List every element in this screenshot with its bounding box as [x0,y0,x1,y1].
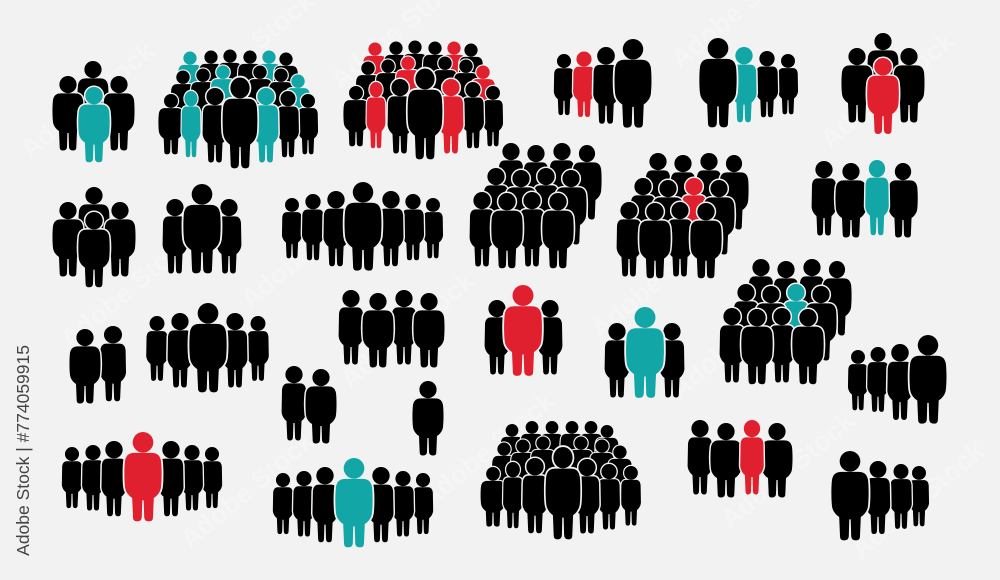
watermark pattern: Adobe Stock [15,35,161,165]
group: trio with tall red center [485,285,562,376]
group: row of five black people [146,303,269,392]
group: four black people [52,187,136,287]
group: black crowd with tall center [481,421,641,539]
group: crowd with red figure [617,153,749,278]
watermark pattern: Adobe Stock [335,265,481,395]
icon: single person [412,381,444,456]
group: teal accented crowd [158,50,318,168]
watermark pattern: Adobe Stock [175,425,321,555]
group: row of seven with red center [62,432,222,521]
group: pair of people [282,366,337,444]
group: four people, red in front [841,33,925,134]
group: crowd with teal figure [720,259,852,384]
group: four people, teal in front [52,61,135,162]
group: descending line with red figure [554,39,651,128]
watermark pattern: Adobe Stock [665,275,811,405]
group: descending line of four [831,451,929,540]
group: line of four with teal figure [812,160,918,238]
group: ascending line of four [848,335,946,424]
group: row of seven black people [282,182,443,271]
watermark pattern: Adobe Stock [235,185,381,315]
group: trio with tall center [163,184,241,274]
group: row of four black people [339,290,445,368]
watermark pattern: Adobe Stock [845,435,991,565]
group: black crowd in three rows [470,143,602,268]
group: row of seven with teal center [273,458,433,547]
group: line with teal figure [699,38,798,127]
group: trio with tall teal center [605,307,684,398]
group: pair of people [69,326,126,404]
watermark pattern: Adobe Stock [815,25,961,155]
stock id side text: Adobe Stock | #774059915 [13,345,33,556]
group: red accented crowd [343,40,503,159]
watermark pattern: Adobe Stock [415,385,561,515]
watermark pattern: Adobe Stock [55,225,201,355]
watermark pattern: Adobe Stock [715,405,861,535]
watermark pattern: Adobe Stock [585,215,731,345]
group: line of four with red figure [688,420,793,498]
